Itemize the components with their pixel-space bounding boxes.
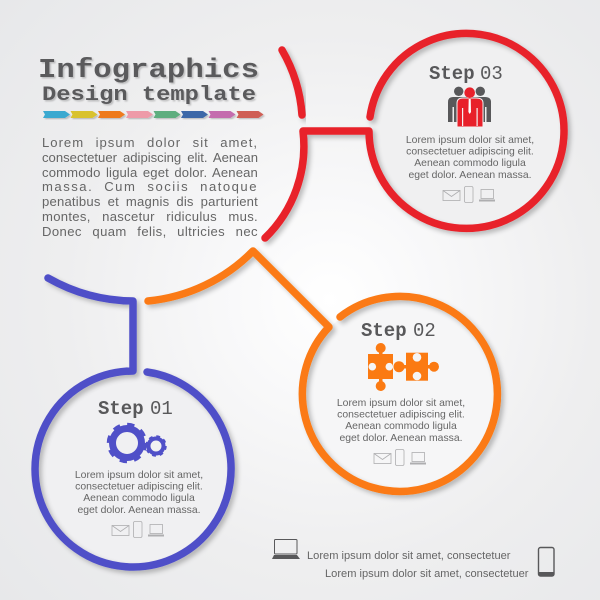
icon: phone (538, 548, 554, 576)
icon: gears (109, 425, 166, 461)
step 01 ring (35, 278, 231, 567)
icon: laptop (272, 540, 300, 559)
step 03 heading: Step (429, 63, 475, 85)
body text block: massa. Cum sociis natoque (42, 179, 258, 194)
title: Infographics (38, 56, 259, 86)
footer text (307, 550, 529, 580)
body text block: commodo ligula eget dolor. Aenean (42, 164, 258, 180)
step 02 text: Lorem ipsum dolor sit amet, (337, 398, 465, 409)
step 02 ring (148, 251, 497, 491)
step 03 text: Lorem ipsum dolor sit amet, (406, 135, 534, 146)
step 01 heading: 01 (150, 398, 173, 420)
step 03 ring (265, 33, 564, 238)
icon: puzzle (368, 343, 439, 391)
step 01 text: eget dolor. Aenean massa. (77, 505, 201, 516)
body text block: Donec quam felis, ultricies nec (42, 224, 258, 238)
step 02 heading: Step (361, 320, 407, 342)
step 01 heading: Step (98, 398, 144, 420)
step 03 text: consectetuer adipiscing elit. (406, 146, 534, 158)
icon: people (448, 87, 491, 127)
step 03 heading (429, 63, 503, 85)
red connector arc top (282, 50, 302, 115)
body text block: penatibus et magnis dis parturient (42, 194, 258, 209)
step 03 text: eget dolor. Aenean massa. (408, 170, 532, 181)
step 02 heading: 02 (413, 320, 436, 342)
step 02 text (337, 398, 465, 444)
step 01 heading (98, 398, 173, 420)
step 01 device icons (112, 522, 164, 538)
footer text: Lorem ipsum dolor sit amet, consectetuer (325, 568, 529, 580)
arrow strip (43, 111, 264, 118)
step 01 text: consectetuer adipiscing elit. (75, 482, 203, 492)
step 01 text: Lorem ipsum dolor sit amet, (75, 470, 203, 481)
step 03 text: Aenean commodo ligula (414, 158, 526, 169)
step 02 device icons (374, 450, 426, 466)
step 03 device icons (443, 186, 495, 202)
step 02 text: consectetuer adipiscing elit. (337, 410, 465, 420)
body text block: consectetuer adipiscing elit. Aenean (42, 150, 258, 165)
step 02 text: eget dolor. Aenean massa. (339, 433, 463, 444)
body text block (42, 135, 258, 238)
step 02 text: Aenean commodo ligula (345, 421, 457, 432)
step 01 text: Aenean commodo ligula (83, 493, 195, 504)
step 02 heading (361, 320, 436, 342)
step 03 text (406, 135, 534, 181)
body text block: Lorem ipsum dolor sit amet, (42, 135, 258, 150)
body text block: montes, nascetur ridiculus mus. (42, 209, 258, 224)
step 01 text (75, 470, 203, 516)
footer text: Lorem ipsum dolor sit amet, consectetuer (307, 550, 511, 562)
step 03 heading: 03 (480, 63, 503, 85)
title: Design template (42, 84, 256, 107)
title (38, 56, 259, 107)
